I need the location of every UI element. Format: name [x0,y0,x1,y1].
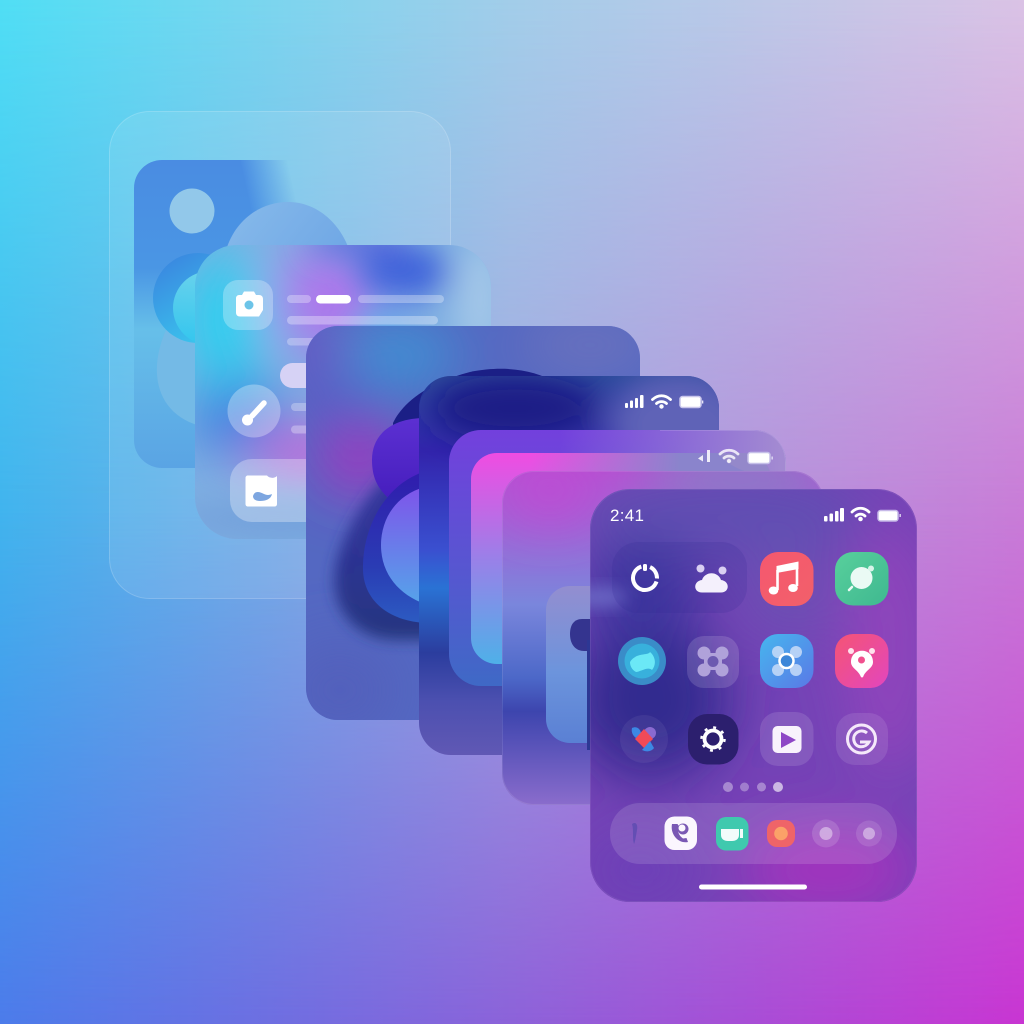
lower blob [157,330,230,430]
app: video [760,712,814,766]
home indicator [699,884,807,890]
lens blob [153,253,243,343]
lens highlight [173,271,247,345]
app: phone [664,816,697,850]
brush tile [228,384,280,438]
icon: cloud [695,564,728,592]
panel: back glass card [110,112,450,598]
icon: battery [680,396,703,408]
panel: purple glass card [449,430,786,686]
dock glyph [632,823,637,844]
app: pink pin [835,634,888,688]
dark edge [587,640,595,750]
icon: signal [824,508,844,522]
icon: power ring [629,562,661,594]
icon: battery faded [748,452,773,464]
page dots [723,782,783,792]
icon: signal faded [698,450,710,462]
icon: wifi faded [720,450,738,462]
avatar circle [170,188,214,234]
lens circle [381,489,419,602]
screen corner fold [721,453,770,471]
top blob [226,202,350,300]
app: music [760,552,814,606]
icon: camera [236,292,263,316]
status time: 2:41 [610,506,644,525]
panel 1 inner shape [134,160,290,468]
app: green [835,552,888,606]
panel: status bar card [419,376,719,755]
dark tile glyph [570,619,595,651]
icon: signal [625,395,644,408]
list bar 3 [287,338,337,346]
app: green cup [716,817,748,850]
icon: wifi [652,396,670,407]
panel: frosted card [502,471,821,805]
icon: brush [252,403,264,416]
blue blob [363,474,419,622]
side bar a [291,403,315,411]
list bars row 1 [287,295,444,304]
brush head [242,414,253,426]
dock circle a [812,820,840,848]
panel: home screen [590,489,917,902]
widget group [612,542,747,613]
toggle pill [280,363,330,388]
purple blob [372,418,419,498]
app: grey clover [687,636,739,688]
app: spiral [836,713,888,765]
camera tile [223,280,273,330]
gradient screen [471,453,770,664]
app: blue flower [760,634,814,688]
icon: photo [246,476,277,506]
app: coral dot [767,820,795,847]
dark wedge [393,368,542,425]
icon: wifi [852,508,869,520]
side bar b [291,426,315,434]
dark blob [328,478,419,648]
app: settings [688,714,738,764]
photo tile [230,459,340,522]
panel: dark blob card [306,326,640,720]
glass tile [546,586,636,743]
app: colour knot [620,715,668,763]
icon: battery [878,510,901,521]
panel: control card [195,245,491,539]
list bar 2 [287,316,438,324]
dock [610,803,897,864]
app: globe [618,637,666,685]
dock circle b [856,820,882,846]
